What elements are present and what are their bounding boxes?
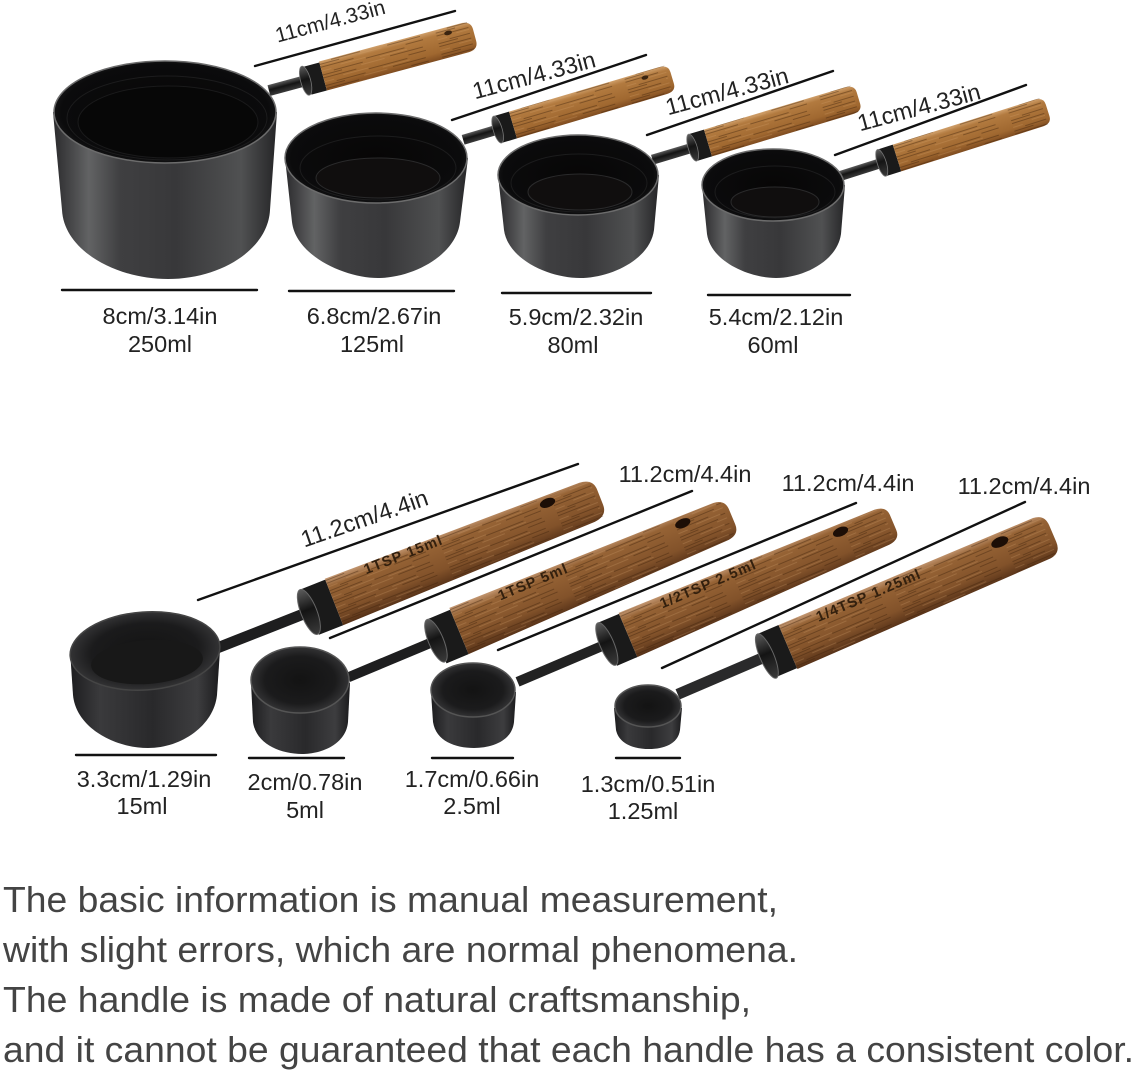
spoon size labels [77, 766, 715, 824]
spoon size labels: 1.25ml [608, 798, 678, 824]
spoon size labels: 15ml [117, 793, 167, 819]
cup size labels: 6.8cm/2.67in [307, 303, 441, 329]
handle length labels: spoons: 11.2cm/4.4in [297, 485, 431, 552]
handle 5ml: 1TSP 5ml [496, 561, 571, 604]
panel: four measuring spoons [67, 473, 1062, 754]
cup size labels: 5.4cm/2.12in [709, 304, 843, 330]
spoon 5ml [251, 494, 742, 754]
cup 60ml [702, 97, 1052, 278]
spoon 1.25ml [614, 511, 1062, 749]
handle length labels: cups [273, 0, 983, 136]
cup size labels: 125ml [340, 331, 404, 357]
handle 60ml [836, 97, 1052, 189]
disclaimer text block: and it cannot be guaranteed that each handle has a consistent color. [3, 1029, 1134, 1070]
disclaimer text block: with slight errors, which are normal phenomena. [2, 929, 798, 970]
spoon size labels: 5ml [286, 797, 324, 823]
spoon 15ml [67, 473, 609, 748]
cup size labels: 250ml [128, 331, 192, 357]
handle 15ml [208, 473, 609, 671]
handle length labels: cups: 11cm/4.33in [470, 46, 598, 104]
panel: four measuring cups [53, 21, 1052, 279]
spoon size labels: 3.3cm/1.29in [77, 766, 211, 792]
handle 15ml: 1TSP 15ml [362, 532, 446, 578]
handle 80ml [648, 84, 862, 173]
handle 125ml [459, 64, 676, 153]
handle length labels: cups: 11cm/4.33in [855, 78, 983, 136]
cup size labels: 80ml [548, 332, 598, 358]
handle 1.25ml: 1/4TSP 1.25ml [814, 566, 924, 626]
disclaimer text block: The handle is made of natural craftsmanship, [3, 979, 751, 1020]
spoon size labels: 2cm/0.78in [248, 769, 362, 795]
handle 250ml [265, 21, 478, 105]
spoon size labels: 2.5ml [443, 793, 501, 819]
handle 5ml [339, 494, 742, 700]
cup 80ml [498, 84, 862, 278]
cup size labels: 60ml [748, 332, 798, 358]
cup 250ml [53, 21, 478, 279]
handle length labels: cups: 11cm/4.33in [663, 62, 791, 120]
cup size labels: 8cm/3.14in [103, 303, 217, 329]
cup 125ml [285, 64, 676, 278]
handle 1.25ml [668, 511, 1062, 716]
disclaimer text block: The basic information is manual measurement, [3, 879, 778, 920]
handle length labels: spoons: 11.2cm/4.4in [958, 473, 1090, 499]
spoon size labels: 1.3cm/0.51in [581, 771, 715, 797]
handle length labels: spoons: 11.2cm/4.4in [782, 470, 914, 496]
dimension lines [62, 11, 1026, 758]
handle length labels: spoons [297, 461, 1090, 552]
cup size labels: 5.9cm/2.32in [509, 304, 643, 330]
spoon 2.5ml [431, 500, 902, 748]
handle 2.5ml: 1/2TSP 2.5ml [658, 557, 759, 612]
cup size labels [103, 303, 843, 358]
handle 2.5ml [508, 500, 902, 704]
handle length labels: spoons: 11.2cm/4.4in [619, 461, 751, 487]
spoon size labels: 1.7cm/0.66in [405, 766, 539, 792]
disclaimer text block [2, 879, 1134, 1070]
